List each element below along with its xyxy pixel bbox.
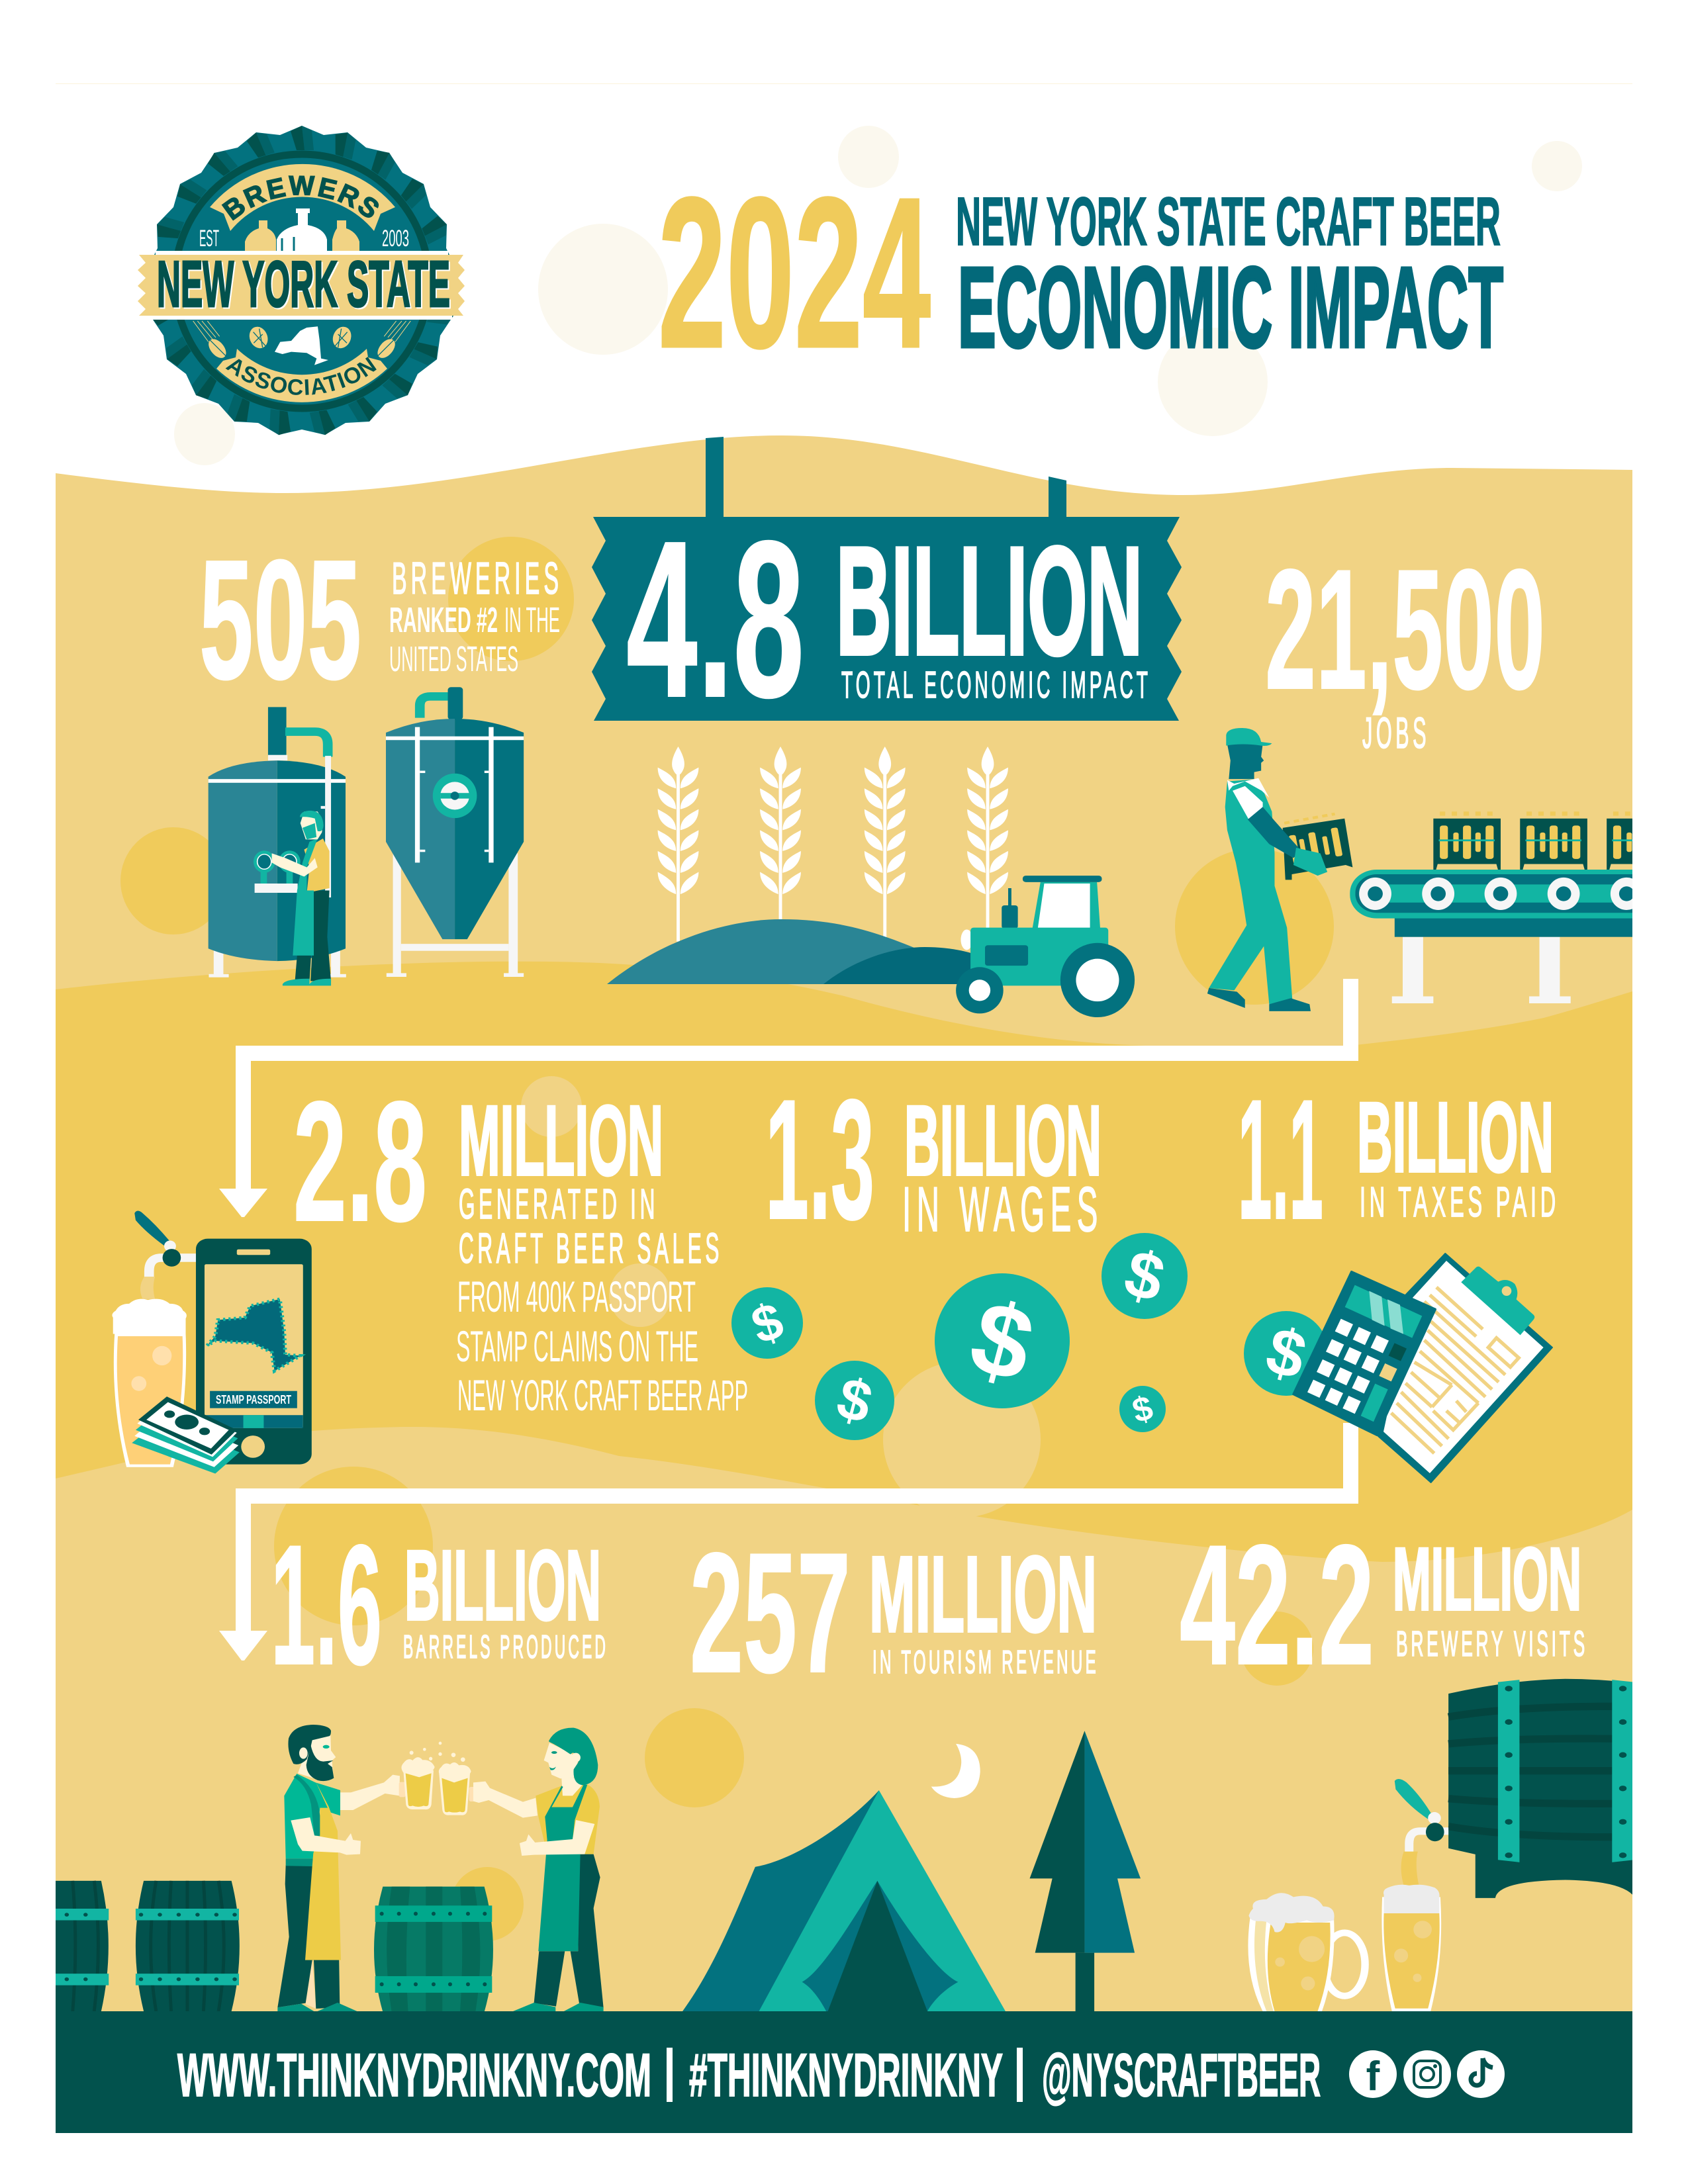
connector arrow: top row to middle row xyxy=(219,979,1358,1217)
text: BREWERIES xyxy=(392,553,563,604)
illustration: pine tree xyxy=(1030,1731,1141,2013)
icon: instagram xyxy=(1403,2050,1451,2098)
illustration: center barrel xyxy=(374,1887,493,2012)
stat: 21,500 jobs: JOBS xyxy=(1362,708,1430,757)
stat: 505 breweries xyxy=(199,525,563,715)
coin 3 big: $ xyxy=(959,1279,1045,1404)
NEW YORK STATE: NEW YORK STATE xyxy=(157,248,450,320)
505: 505 xyxy=(199,525,361,715)
BREWERS path xyxy=(212,195,392,246)
footer: website: WWW.THINKNYDRINKNY.COM xyxy=(177,2042,651,2109)
stat: 1.3 billion: BILLION xyxy=(904,1085,1102,1196)
coin 5 small: $ xyxy=(1129,1388,1157,1431)
panel top hairline xyxy=(56,83,1632,84)
text: NEW YORK CRAFT BEER APP xyxy=(457,1371,748,1420)
MILLION: MILLION xyxy=(869,1533,1097,1655)
stat: 2.8 million xyxy=(293,1066,748,1420)
background dots: light yellow xyxy=(521,1076,1041,1518)
coin 2 xyxy=(815,1361,894,1440)
4.8: 4.8 xyxy=(626,495,804,744)
stat: 1.1 billion: 1.1 xyxy=(1238,1064,1323,1255)
257: 257 xyxy=(690,1517,851,1708)
2.8: 2.8 xyxy=(293,1066,427,1257)
icons: dollar coins xyxy=(731,1233,1329,1440)
logo: Brewers Association of New York State bottle cap xyxy=(138,126,465,435)
text: IN WAGES xyxy=(902,1174,1103,1245)
illustration: big hill xyxy=(607,919,927,984)
illustration: clipboard and calculator xyxy=(1293,1253,1552,1482)
cap crimp shadows xyxy=(146,126,458,437)
coin 6 xyxy=(1244,1311,1329,1396)
kettle trio xyxy=(245,208,359,251)
coin 3 big xyxy=(935,1273,1070,1408)
RANKED #2: RANKED #2 xyxy=(389,600,498,640)
icon: facebook xyxy=(1349,2050,1397,2099)
42.2: 42.2 xyxy=(1180,1509,1374,1700)
stat: 2.8 million: STAMP CLAIMS ON THE xyxy=(456,1322,698,1371)
banner shape xyxy=(592,517,1182,721)
illustration: brew kettle with brewer xyxy=(209,707,346,985)
illustration: small hill xyxy=(823,947,980,984)
text: @NYSCRAFTBEER xyxy=(1042,2042,1321,2109)
illustration: beer mug xyxy=(1248,1893,1365,2011)
2003: 2003 xyxy=(382,226,409,251)
landscape background: darker band xyxy=(56,962,1632,1562)
inner ring xyxy=(175,154,429,408)
ribbon xyxy=(138,251,465,320)
stat: 1.6 billion barrels: BILLION xyxy=(404,1529,601,1641)
coin 4 xyxy=(1102,1233,1188,1319)
hanging banner: 4.8 billion: TOTAL ECONOMIC IMPACT xyxy=(841,664,1151,706)
ASSOCIATION path xyxy=(209,351,395,395)
stat: 21,500 jobs xyxy=(1265,533,1545,757)
coin 1: $ xyxy=(745,1291,790,1355)
footer divider 2 xyxy=(1017,2048,1023,2102)
title: 2024: 2024 xyxy=(658,153,931,392)
footer bar xyxy=(56,2011,1632,2133)
MILLION: MILLION xyxy=(459,1085,663,1196)
top arch banner xyxy=(210,164,395,231)
illustration: fermenter tank xyxy=(386,687,524,977)
background dots: dark yellow xyxy=(120,537,1334,1941)
BREWERS label: BREWERS xyxy=(221,175,379,221)
coin 4: $ xyxy=(1117,1236,1172,1316)
footer: hashtag: #THINKNYDRINKNY xyxy=(689,2042,1003,2109)
illustration: conveyor belt with crates xyxy=(1350,811,1674,1003)
stat: 1.3 billion: 1.3 xyxy=(765,1064,874,1255)
cap body with teeth xyxy=(147,126,457,435)
text: IN THE xyxy=(504,600,560,640)
illustration: factory worker with crate xyxy=(1207,728,1352,1011)
STAMP PASSPORT label: STAMP PASSPORT xyxy=(216,1393,291,1406)
banner post right xyxy=(1049,477,1066,517)
stat: 1.6 billion barrels: 1.6 xyxy=(271,1509,382,1700)
stat: 505 breweries: UNITED STATES xyxy=(389,639,518,679)
stat: 2.8 million: FROM 400K PASSPORT xyxy=(457,1272,696,1321)
text: BARRELS PRODUCED xyxy=(403,1629,608,1665)
illustration: tractor xyxy=(956,876,1135,1017)
icon: facebook: f xyxy=(1366,2054,1380,2099)
header bubbles xyxy=(174,126,1582,465)
hanging banner: 4.8 billion xyxy=(592,437,1182,744)
hanging banner: 4.8 billion: BILLION xyxy=(836,516,1143,687)
coin 1 xyxy=(731,1287,803,1359)
banner posts xyxy=(706,437,724,517)
landscape background: light wave xyxy=(56,435,1632,2012)
illustration: beer glass right xyxy=(1382,1885,1441,2011)
stat: 42.2 million visits xyxy=(1180,1509,1588,1700)
text: IN TOURISM REVENUE xyxy=(872,1645,1099,1680)
connector arrow: middle row to bottom row xyxy=(219,1423,1358,1661)
illustration: big barrel with tap xyxy=(1395,1679,1652,1898)
illustration: wheat stalks xyxy=(658,747,1008,942)
illustration: man toasting beer xyxy=(277,1725,400,2012)
NY state, hops and wheat xyxy=(193,321,410,365)
illustration: clinking beer mugs xyxy=(399,1742,475,1815)
illustration: woman toasting beer xyxy=(473,1728,604,2012)
coin 6: $ xyxy=(1259,1313,1313,1394)
icon: tiktok xyxy=(1457,2050,1505,2098)
illustration: barrels row left xyxy=(43,1881,240,2011)
icon: crescent moon xyxy=(931,1744,980,1798)
logo: Brewers Association of New York State bottle cap: EST xyxy=(199,226,219,251)
illustration: beer tap, glass, phone and cash xyxy=(112,1211,312,1474)
illustration: tent xyxy=(682,1790,1006,2011)
bottom arch banner xyxy=(216,349,387,402)
stat: 2.8 million: GENERATED IN xyxy=(459,1180,659,1228)
footer divider xyxy=(667,2048,673,2102)
coin 5 small xyxy=(1119,1386,1166,1432)
stat: 257 million tourism xyxy=(690,1517,1099,1708)
coin 2: $ xyxy=(831,1364,879,1436)
stat: 2.8 million: CRAFT BEER SALES xyxy=(459,1224,723,1272)
ASSOCIATION label: ASSOCIATION xyxy=(225,357,377,395)
